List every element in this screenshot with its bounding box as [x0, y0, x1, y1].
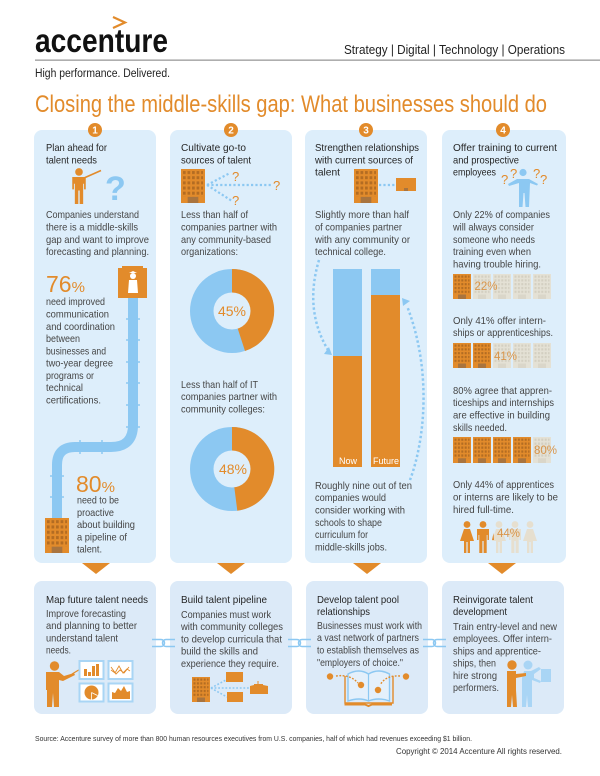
icon: open book [327, 671, 409, 706]
heading [453, 143, 557, 178]
text [453, 386, 554, 434]
heading [314, 143, 419, 178]
text: Companies must work [181, 610, 272, 621]
text: ships and apprentice- [453, 646, 541, 658]
arrow down 2 [217, 563, 245, 574]
donut chart 48%: 48% [219, 461, 247, 477]
heading: Reinvigorate talent [453, 595, 533, 606]
text: with any community or [314, 235, 411, 246]
arrow down 1 [82, 563, 110, 574]
bar chart: now vs future: Now [339, 456, 357, 466]
badge 4: 4 [500, 126, 506, 136]
text: having trouble hiring. [453, 260, 541, 270]
heading: sources of talent [181, 156, 251, 166]
text: Only 22% of companies [453, 210, 550, 221]
icon: building connected to college [354, 169, 416, 203]
text: Businesses must work with [317, 621, 422, 632]
badge 1 [88, 123, 102, 137]
pictogram 41% [453, 343, 551, 368]
heading: employees [453, 168, 496, 178]
heading: Develop talent pool [317, 595, 399, 606]
text: Train entry-level and new [453, 622, 558, 633]
heading: talent needs [46, 156, 97, 166]
text [453, 316, 553, 339]
stat 80% text: need to be [77, 496, 119, 506]
icon: presenter with question mark: ? [105, 170, 126, 208]
text: or interns are likely to be [453, 492, 558, 504]
text [315, 481, 412, 554]
badge 2 [224, 123, 238, 137]
stat 76% text: technical [46, 383, 83, 394]
text: schools to shape [315, 518, 382, 529]
arrow down 4 [488, 563, 516, 574]
text: companies partner with [181, 222, 277, 234]
text: employees. Offer intern- [453, 634, 552, 645]
text [180, 610, 283, 670]
icon: confused person: ? [533, 166, 540, 181]
pictogram 44% people: 44% [497, 528, 520, 540]
text: consider working with [315, 506, 405, 516]
text: Improve forecasting [46, 609, 126, 620]
donut chart 45%: 45% [218, 303, 246, 319]
intro text: there is a middle-skills [46, 222, 138, 234]
text: any community-based [181, 235, 271, 246]
stat 76% text: communication [46, 310, 109, 320]
text: Only 44% of apprentices [453, 480, 554, 491]
text: needs. [46, 646, 71, 656]
pictogram 41%: 41% [494, 351, 517, 363]
panel: build talent pipeline [170, 581, 292, 714]
icon: presenter with question mark [72, 168, 126, 208]
badge 3: 3 [363, 126, 369, 136]
bar chart: now vs future: Future [373, 456, 399, 466]
pictogram 80%: 80% [534, 445, 557, 457]
text: companies would [315, 493, 386, 504]
text: training even when [453, 247, 531, 258]
text: companies partner with [181, 392, 277, 403]
intro text [46, 210, 149, 258]
heading [453, 595, 533, 618]
panel: reinvigorate talent development [442, 581, 564, 714]
copyright: Copyright © 2014 Accenture All rights reserved. [396, 747, 562, 756]
pictogram 22%: 22% [474, 281, 498, 293]
text: 80% agree that appren- [453, 386, 552, 397]
text [46, 609, 138, 656]
heading: talent [315, 168, 340, 178]
arrow: dotted right [402, 298, 424, 480]
badge 4 [496, 123, 510, 137]
tagline: service areas: Strategy | Digital | Technology | Operations [344, 43, 565, 57]
panel: develop talent pool [306, 581, 428, 714]
text: to establish themselves as [317, 646, 419, 656]
logo: accenture: accenture [35, 22, 168, 59]
heading: with current sources of [314, 156, 413, 166]
icon: building network [192, 672, 268, 702]
text: middle-skills jobs. [315, 542, 387, 554]
text [453, 622, 558, 694]
chain link 2 [288, 640, 311, 646]
tagline: high performance: High performance. Delivered. [35, 68, 170, 80]
icon: building with question marks: ? [232, 169, 239, 184]
text: curriculum for [315, 530, 369, 541]
heading [181, 143, 251, 166]
pictogram 80% [453, 437, 557, 463]
text: Less than half of [181, 210, 248, 221]
stat 76%: 76% [46, 271, 85, 297]
chain link 1 [152, 640, 175, 646]
text: organizations: [181, 247, 238, 258]
stat 76% text: need improved [46, 297, 105, 308]
stat 80% text: about building [77, 520, 135, 531]
panel: map future talent needs [34, 581, 156, 714]
text: Roughly nine out of ten [315, 481, 412, 492]
icon: confused person: ? [540, 172, 547, 187]
heading: and prospective [453, 156, 519, 166]
stat 76% text: programs or [46, 371, 95, 382]
icon: building with question marks: ? [232, 193, 239, 208]
stat 76% text [46, 297, 115, 406]
panel: 4 offer training [442, 123, 566, 563]
stat 80%: 80% [76, 471, 115, 497]
heading: Cultivate go-to [181, 143, 246, 154]
text: with community colleges [180, 622, 283, 633]
text: Slightly more than half [315, 210, 409, 221]
heading: relationships [317, 607, 370, 618]
icon: confused person: ? [510, 166, 517, 181]
text: are effective in building [453, 410, 550, 422]
text: someone who needs [453, 235, 535, 246]
arrow: dotted left [313, 260, 332, 355]
badge 3 [359, 123, 373, 137]
stat 80% text [77, 496, 135, 556]
heading: development [453, 607, 507, 618]
stat 76% text: businesses and [46, 346, 106, 358]
arrow down 3 [353, 563, 381, 574]
intro text: gap and want to improve [46, 235, 149, 246]
heading: Build talent pipeline [181, 595, 267, 606]
text: to develop curricula that [181, 634, 282, 646]
text [314, 210, 411, 258]
icon: building with question marks: ? [273, 178, 280, 193]
pipeline graphic [45, 266, 147, 553]
text: will always consider [452, 222, 535, 234]
stat 80% text: proactive [77, 508, 114, 519]
text: Less than half of IT [181, 380, 258, 391]
text: technical college. [315, 247, 386, 258]
text: hired full-time. [453, 505, 514, 516]
text [317, 621, 422, 669]
panel: 3 strengthen [305, 123, 427, 563]
text: build the skills and [181, 646, 258, 658]
stat 80% text: a pipeline of [77, 532, 127, 544]
badge 2: 2 [228, 126, 234, 136]
text: skills needed. [453, 423, 507, 434]
text [181, 210, 277, 258]
chain link 3 [423, 640, 446, 646]
badge 1: 1 [92, 126, 98, 136]
heading: Map future talent needs [46, 595, 148, 606]
text: "employers of choice." [317, 658, 403, 669]
text: of companies partner [315, 222, 403, 234]
text [453, 480, 558, 516]
stat 76% text: and coordination [46, 322, 115, 333]
source note: Source: Accenture survey of more than 800 human resources executives from U.S. companies, half of which had revenues exceeding $1 billion. [35, 734, 472, 743]
pictogram 22% [453, 274, 551, 299]
heading: Offer training to current [453, 143, 557, 154]
icon: confused person [501, 166, 547, 207]
heading: Strengthen relationships [315, 143, 419, 154]
icon: presenter with charts [46, 661, 132, 707]
heading [46, 143, 107, 166]
bar chart: now vs future [333, 269, 400, 467]
text: a vast network of partners [317, 633, 419, 644]
donut chart 48% [190, 427, 274, 511]
text: hire strong [453, 671, 497, 682]
text: ticeships and internships [453, 398, 554, 409]
text: and planning to better [46, 621, 138, 632]
text: experience they require. [181, 659, 279, 670]
icon: building with question marks [181, 169, 280, 208]
donut chart 45% [190, 269, 274, 353]
stat 76% text: certifications. [46, 396, 101, 406]
stat 80% text: talent. [77, 544, 102, 556]
text: community colleges: [181, 404, 265, 416]
stat 76% text: between [46, 334, 80, 345]
pictogram 44% people [460, 521, 537, 553]
text: understand talent [46, 634, 118, 644]
panel: 2 cultivate [170, 123, 292, 563]
text [181, 380, 277, 416]
panel: 1 plan ahead [34, 123, 156, 563]
text: ships or apprenticeships. [453, 328, 553, 339]
intro text: Companies understand [46, 210, 139, 221]
heading [317, 595, 399, 618]
icon: confused person: ? [501, 172, 508, 187]
stat 76% text: two-year degree [46, 358, 113, 370]
text: performers. [453, 683, 499, 694]
intro text: forecasting and planning. [46, 247, 149, 258]
heading: Plan ahead for [46, 143, 107, 154]
text [452, 210, 550, 270]
text: ships, then [453, 658, 496, 670]
text: Only 41% offer intern- [453, 316, 546, 327]
icon: mentor and employee [507, 660, 551, 707]
